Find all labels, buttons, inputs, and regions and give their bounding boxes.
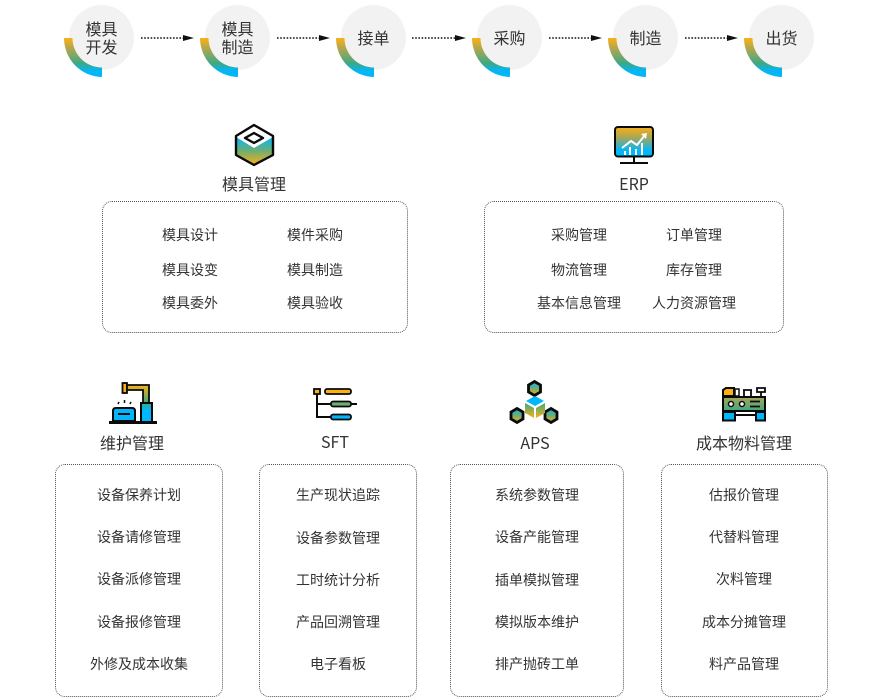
step: 出货 <box>744 5 814 77</box>
panel: ERP <box>484 201 784 333</box>
panel: APS <box>450 464 624 697</box>
arrow <box>277 35 330 41</box>
panel: 维护管理: 外修及成本收集 <box>90 654 188 674</box>
panel: APS: 设备产能管理 <box>495 527 579 547</box>
step: 模具制造: 模具 <box>221 16 254 40</box>
heading: SFT: SFT <box>321 429 349 453</box>
panel: 模具管理: 模具设变 <box>162 260 218 280</box>
panel: 维护管理 <box>55 464 223 697</box>
panel: APS: 模拟版本维护 <box>495 612 579 632</box>
step: 模具制造: 制造 <box>221 34 254 58</box>
heading: APS: APS <box>520 430 550 454</box>
heading: 模具管理: 模具管理 <box>222 171 286 195</box>
panel: 成本物料管理: 料产品管理 <box>709 654 779 674</box>
arrow <box>685 35 738 41</box>
panel: 成本物料管理: 成本分摊管理 <box>702 612 786 632</box>
panel: 成本物料管理: 代替料管理 <box>709 527 779 547</box>
panel: ERP: 人力资源管理 <box>652 293 736 313</box>
panel: SFT: 设备参数管理 <box>296 528 380 548</box>
panel: SFT: 产品回溯管理 <box>296 612 380 632</box>
panel: 维护管理: 设备保养计划 <box>97 485 181 505</box>
panel: ERP: 物流管理 <box>551 260 607 280</box>
panel: ERP: 订单管理 <box>666 225 722 245</box>
step: 制造 <box>608 5 678 77</box>
arrow <box>549 35 602 41</box>
icon: monitor chart <box>615 127 653 163</box>
arrow <box>141 35 194 41</box>
icon: tree list <box>314 389 357 420</box>
heading: ERP: ERP <box>619 171 649 195</box>
panel: SFT: 生产现状追踪 <box>296 485 380 505</box>
step: 模具开发: 开发 <box>85 34 118 58</box>
panel: 模具管理: 模件采购 <box>287 225 343 245</box>
heading: 维护管理: 维护管理 <box>100 430 164 454</box>
step: 模具制造 <box>200 5 270 77</box>
step: 接单 <box>336 5 406 77</box>
icon: machine <box>723 388 765 420</box>
step: 采购: 采购 <box>493 25 526 49</box>
panel: 模具管理: 模具设计 <box>162 225 218 245</box>
step: 模具开发 <box>64 5 134 77</box>
step: 制造: 制造 <box>629 25 662 49</box>
panel: 成本物料管理: 估报价管理 <box>709 485 779 505</box>
panel: SFT <box>259 464 417 697</box>
panel: 维护管理: 设备请修管理 <box>97 527 181 547</box>
panel: ERP: 库存管理 <box>666 260 722 280</box>
heading: 成本物料管理: 成本物料管理 <box>696 430 792 454</box>
icon: robot arm <box>109 383 157 422</box>
panel: 模具管理: 模具委外 <box>162 293 218 313</box>
panel: 维护管理: 设备派修管理 <box>97 569 181 589</box>
step: 模具开发: 模具 <box>85 16 118 40</box>
panel: 模具管理: 模具验收 <box>287 293 343 313</box>
panel: ERP: 基本信息管理 <box>537 293 621 313</box>
panel: 模具管理: 模具制造 <box>287 260 343 280</box>
panel: 维护管理: 设备报修管理 <box>97 612 181 632</box>
panel: 成本物料管理: 次料管理 <box>716 569 772 589</box>
panel: APS: 插单模拟管理 <box>495 570 579 590</box>
step: 出货: 出货 <box>765 25 798 49</box>
panel: APS: 系统参数管理 <box>495 485 579 505</box>
icon: hex network <box>511 382 557 422</box>
panel: APS: 排产抛砖工单 <box>495 654 579 674</box>
panel: SFT: 电子看板 <box>310 654 366 674</box>
arrow <box>412 35 466 41</box>
panel: SFT: 工时统计分析 <box>296 570 380 590</box>
panel: 模具管理 <box>102 201 408 333</box>
panel: ERP: 采购管理 <box>551 225 607 245</box>
step: 采购 <box>472 5 542 77</box>
step: 接单: 接单 <box>357 25 390 49</box>
icon: cube <box>236 125 273 165</box>
panel: 成本物料管理 <box>661 464 828 697</box>
